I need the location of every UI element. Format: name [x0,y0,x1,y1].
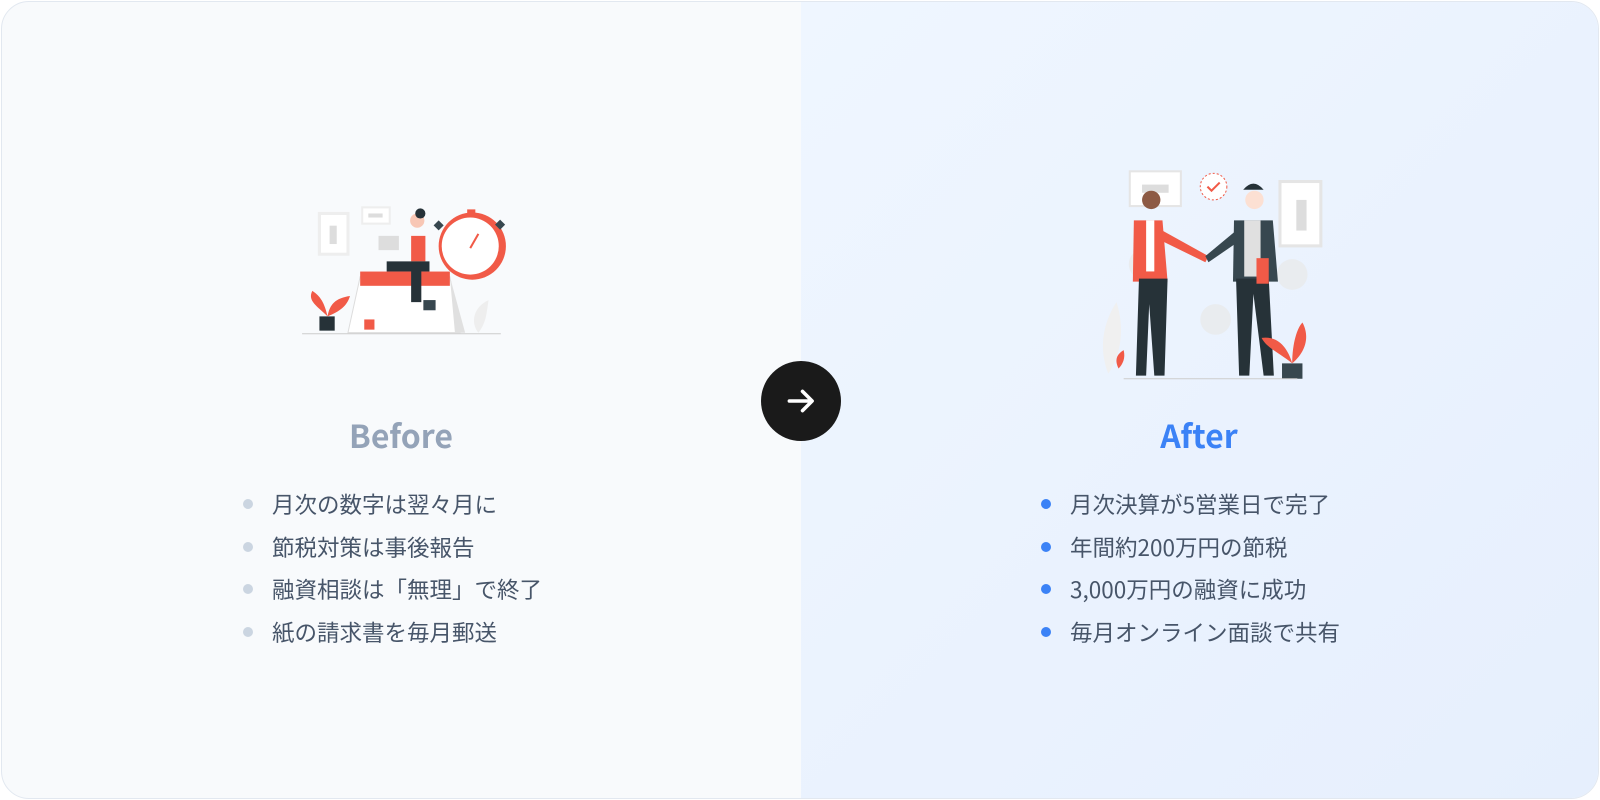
list: after: 3,000万円の融資に成功 [1070,573,1306,605]
list: before: 月次の数字は翌々月に [272,488,497,520]
list: before: 節税対策は事後報告 [272,530,475,562]
list: after: 毎月オンライン面談で共有 [1070,616,1340,648]
illustration: before (calendar, woman, stopwatch) [302,206,506,334]
list: after [1041,488,1340,648]
list: before [243,488,542,648]
heading: After: After [1160,412,1238,458]
heading: Before: Before [349,412,453,458]
list: before: 紙の請求書を毎月郵送 [272,616,497,648]
list: after: 月次決算が5営業日で完了 [1070,488,1330,520]
list: after: 年間約200万円の節税 [1070,530,1287,562]
list: before: 融資相談は「無理」で終了 [272,573,542,605]
arrow circle [761,361,841,441]
illustration: after (handshake) [1103,170,1322,380]
